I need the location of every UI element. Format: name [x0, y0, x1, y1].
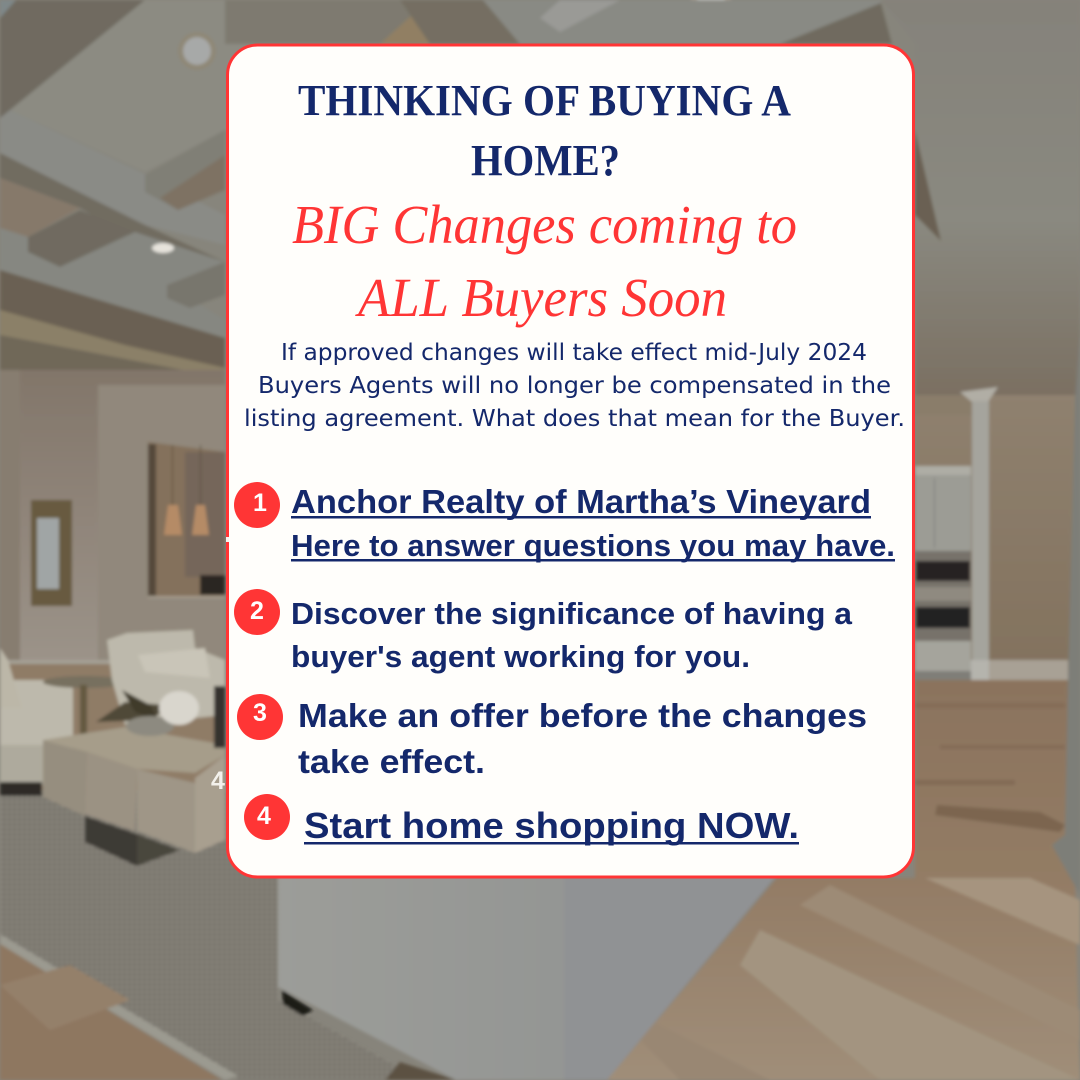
text block: intro paragraph: If approved changes will take effect mid-July 2024: [281, 340, 867, 366]
text: anchor realty: [291, 483, 895, 563]
kitchen cabinets and ovens: [915, 466, 971, 680]
left wall with mirror and niche: [0, 370, 225, 670]
curtain at right edge: [1052, 330, 1080, 895]
list item 1: [234, 482, 895, 563]
subheading: big changes: [292, 194, 797, 328]
text block: intro paragraph: listing agreement. What does that mean for the Buyer.: [244, 406, 905, 432]
subheading: big changes: ALL Buyers Soon: [354, 267, 727, 328]
text: significance of a buyer's agent: [291, 596, 853, 674]
stray tick on card edge: [226, 537, 229, 542]
icon: flower arrangement on table: [96, 690, 199, 736]
coffee table: [43, 686, 225, 866]
right floor with planks: [607, 680, 1080, 1080]
heading: thinking of buying a home: [298, 76, 791, 185]
top beams behind card: [225, 0, 892, 44]
icon: number badge 3: 3: [253, 699, 267, 727]
ceiling and upper-left beams: [0, 0, 1080, 410]
heading: thinking of buying a home: HOME?: [471, 136, 620, 185]
list item 3: [237, 694, 867, 780]
text: make an offer: [298, 697, 867, 780]
sofa and side table: [0, 648, 127, 796]
icon: number badge 2: [234, 589, 280, 635]
text block: intro paragraph: [244, 340, 905, 432]
panel: white message card: [228, 45, 914, 877]
text: anchor realty: Here to answer questions you may have.: [291, 528, 895, 563]
icon: number badge 3: [237, 694, 283, 740]
text: significance of a buyer's agent: Discover the significance of having a: [291, 596, 853, 631]
subheading: big changes: BIG Changes coming to: [292, 194, 797, 255]
icon: number badge 1: [234, 482, 280, 528]
text: make an offer: take effect.: [298, 743, 485, 780]
left floor and rug: [0, 664, 456, 1080]
right wall and column: [915, 387, 1080, 685]
icon: number badge 4: [244, 794, 290, 840]
icon: ceiling downlights: [152, 0, 1051, 380]
heading: thinking of buying a home: THINKING OF BUYING A: [298, 76, 791, 125]
icon: number badge 2: 2: [250, 597, 264, 625]
icon: number badge 4: 4: [257, 802, 271, 830]
text block: intro paragraph: Buyers Agents will no longer be compensated in the: [258, 373, 891, 399]
text: start home shopping: Start home shopping NOW.: [304, 805, 799, 846]
text: anchor realty: Anchor Realty of Martha’s Vineyard: [291, 483, 871, 520]
list item 2: [234, 589, 853, 674]
right ceiling: [881, 0, 1080, 400]
ottoman in foreground: [278, 870, 781, 1080]
stray number 4 behind card: 4: [211, 767, 225, 795]
list item 4: [244, 794, 799, 846]
text: significance of a buyer's agent: buyer's agent working for you.: [291, 639, 750, 674]
icon: number badge 1: 1: [253, 489, 267, 517]
armchair: [107, 630, 225, 725]
text: make an offer: Make an offer before the changes: [298, 697, 867, 734]
